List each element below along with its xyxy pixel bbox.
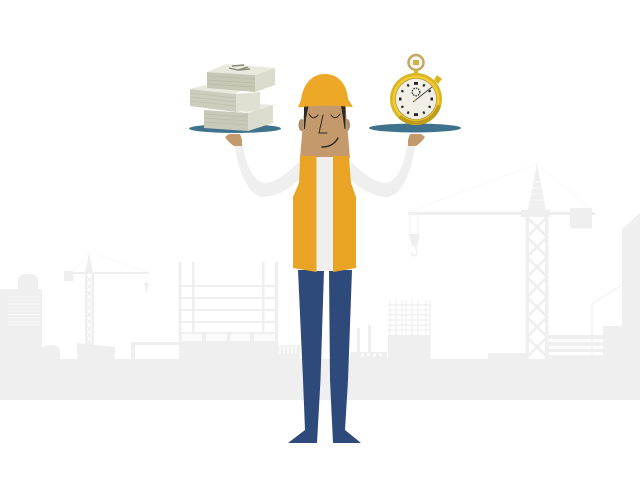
money stacks xyxy=(190,64,275,131)
small dome xyxy=(40,345,60,359)
stack: top xyxy=(207,64,275,92)
dial face xyxy=(396,78,436,120)
hard hat xyxy=(298,74,353,108)
horizontal slats xyxy=(548,335,603,359)
crown cap xyxy=(413,60,419,65)
safety vest xyxy=(293,156,356,272)
low outlined box xyxy=(131,342,179,359)
low block by right crane xyxy=(488,353,528,359)
crane base block xyxy=(77,343,115,359)
fence pieces xyxy=(278,345,300,359)
hand pivot xyxy=(414,100,416,102)
case xyxy=(390,73,442,125)
hour marks xyxy=(399,82,433,116)
case shading xyxy=(398,105,441,125)
left office building xyxy=(0,274,42,359)
ears xyxy=(298,119,350,131)
left building frame xyxy=(178,262,278,359)
stopwatch xyxy=(390,55,442,125)
right building xyxy=(603,213,640,359)
hand: right xyxy=(408,134,425,146)
left tower crane xyxy=(64,252,149,345)
stack: bottom xyxy=(204,104,273,131)
small sub-dial xyxy=(412,88,420,96)
hair xyxy=(304,106,346,129)
hand xyxy=(413,87,432,102)
crown ring xyxy=(408,55,424,70)
arm: left xyxy=(235,146,299,197)
case highlight xyxy=(392,76,440,122)
head xyxy=(300,100,350,158)
thin roof outline xyxy=(592,285,622,359)
stack: middle xyxy=(190,85,260,112)
posts beside figure xyxy=(350,325,387,359)
face xyxy=(309,114,340,147)
rebar grid and block xyxy=(387,300,431,359)
arm: right xyxy=(351,146,415,197)
stem xyxy=(414,70,418,75)
tray: right xyxy=(369,124,461,132)
right tower crane xyxy=(408,164,595,359)
side button xyxy=(434,75,442,84)
background: construction skyline xyxy=(0,164,640,400)
banknote print xyxy=(229,65,250,70)
shirt xyxy=(316,157,334,271)
legs: trousers xyxy=(288,270,361,443)
figure: worker xyxy=(225,74,425,443)
ground strip xyxy=(0,359,640,400)
hand: left xyxy=(225,134,242,146)
tray: left xyxy=(189,124,281,133)
